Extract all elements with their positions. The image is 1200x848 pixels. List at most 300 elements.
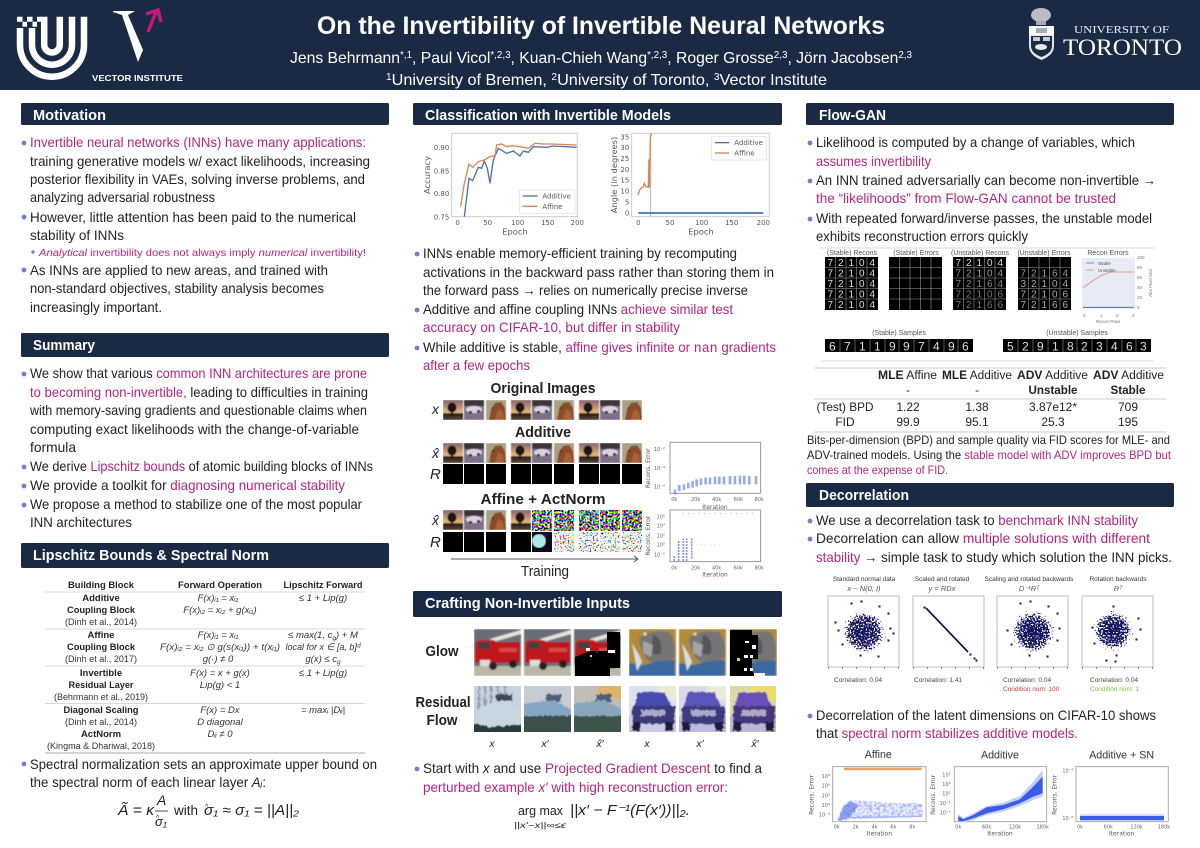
chart: additive reconstruction error: 80k bbox=[755, 497, 764, 503]
text block: flow-gan bullets: exhibits reconstruction errors quickly bbox=[816, 228, 1028, 244]
caption: flow-gan table: comes at the expense of FID. bbox=[807, 463, 948, 477]
chart: additive + spectral norm decorrelation error: 60k bbox=[1104, 824, 1113, 830]
chart: affine reconstruction error: 10⁴ bbox=[657, 524, 665, 530]
table: building blocks: F(x) = Dx bbox=[200, 705, 241, 716]
chart: recon errors by pass: 0 bbox=[1137, 305, 1140, 310]
table: BPD and FID scores: Unstable bbox=[1028, 385, 1078, 397]
table: BPD and FID scores: 25.3 bbox=[1041, 415, 1065, 429]
chart: recon errors by pass: Abs Pixel Dist bbox=[1148, 268, 1153, 297]
grid: stable errors bbox=[889, 257, 942, 310]
chart: affine reconstruction error: 40k bbox=[712, 565, 721, 571]
scatter: standard normal data bbox=[828, 576, 899, 684]
chart: accuracy vs epoch: 0.80 bbox=[434, 190, 449, 198]
logo: University of Toronto: UNIVERSITY OF bbox=[1074, 25, 1169, 36]
table: building blocks: (Dinh et al., 2017) bbox=[65, 654, 137, 665]
image labels: x, x', x-hat': x bbox=[488, 738, 495, 750]
text block: classification bullets bbox=[415, 245, 776, 373]
chart: affine reconstruction error: 20k bbox=[691, 565, 700, 571]
text block: cifar-10 decorrelation: that spectral norm stabilizes additive models. bbox=[816, 725, 1078, 741]
chart: recon errors by pass bbox=[1082, 255, 1153, 324]
chart: additive decorrelation error: Recons. Error bbox=[930, 775, 937, 815]
text block: classification bullets: the forward pass → relies on numerically precise inverse bbox=[423, 282, 748, 298]
table: building blocks: ≤ 1 + Lip(g) bbox=[299, 593, 347, 604]
figure: MNIST reconstructions and errors: (Stable) Errors bbox=[893, 250, 939, 257]
grid: stable reconstructions: 72104 bbox=[828, 290, 876, 300]
table: building blocks: F(x)ᵢ₁ = xᵢ₁ bbox=[198, 630, 238, 641]
heading: flow-gan bbox=[806, 103, 1174, 125]
authors: , Jörn Jacobsen bbox=[787, 50, 898, 67]
table: BPD and FID scores: MLE Affine bbox=[878, 370, 937, 382]
header banner bbox=[0, 0, 1200, 90]
table: building blocks bbox=[45, 580, 365, 753]
scatter: scaled and rotated: Scaled and rotated bbox=[915, 576, 970, 583]
caption: flow-gan table: Bits-per-dimension (BPD) and sample quality via FID scores for MLE- and bbox=[807, 433, 1170, 447]
figure: MNIST reconstructions and errors: (Unstable) Recons bbox=[951, 250, 1009, 257]
table: building blocks: Additive bbox=[82, 593, 120, 604]
text block: cifar-10 decorrelation bbox=[808, 707, 1156, 741]
scatter: scaling and rotated backwards bbox=[985, 576, 1074, 693]
text block: flow-gan bullets bbox=[808, 134, 1156, 244]
authors: *,2,3 bbox=[490, 50, 511, 61]
text block: motivation bullets: posterior flexibility in VAEs, solving inverse problems, and bbox=[30, 171, 365, 187]
chart: angle vs epoch: 30 bbox=[620, 144, 629, 152]
text block: summary bullets: We show that various common INN architectures are prone bbox=[30, 365, 367, 381]
image grid: glow examples bbox=[474, 629, 777, 676]
text block: flow-gan bullets: the “likelihoods” from Flow-GAN cannot be trusted bbox=[816, 190, 1116, 206]
chart: additive decorrelation error: 10⁻¹ bbox=[940, 801, 951, 807]
chart: affine decorrelation error: 2k bbox=[853, 824, 859, 830]
table: BPD and FID scores: FID bbox=[835, 415, 855, 429]
table: BPD and FID scores: (Test) BPD bbox=[816, 400, 874, 414]
formula: spectral normalization: with bbox=[173, 803, 198, 818]
table: building blocks: F(x) = x + g(x) bbox=[190, 668, 250, 679]
text block: flow-gan bullets: Likelihood is computed by a change of variables, which bbox=[816, 134, 1135, 150]
logo: Vector Institute bbox=[92, 10, 183, 83]
panel: motivation bbox=[21, 103, 389, 315]
chart: additive decorrelation error bbox=[930, 750, 1049, 838]
chart: angle vs epoch bbox=[609, 133, 770, 236]
text block: classification bullets: activations in the backward pass rather than storing them in bbox=[423, 264, 774, 280]
table: building blocks: Coupling Block bbox=[67, 605, 136, 616]
chart: angle vs epoch: 15 bbox=[620, 177, 629, 185]
chart: affine decorrelation error: 6k bbox=[890, 824, 896, 830]
image labels: x, x', x-hat': x′ bbox=[695, 738, 705, 750]
chart: recon errors by pass: 20 bbox=[1137, 295, 1143, 300]
table: building blocks: Coupling Block bbox=[67, 642, 136, 653]
chart: additive reconstruction error: 20k bbox=[691, 497, 700, 503]
scatter: rotation backwards: Rotation backwards bbox=[1089, 576, 1147, 583]
table: building blocks: Lipschitz Forward bbox=[284, 580, 363, 591]
chart: additive reconstruction error bbox=[645, 442, 764, 511]
table: building blocks: Residual Layer bbox=[68, 680, 134, 691]
chart: additive decorrelation error: 60k bbox=[982, 824, 991, 830]
text block: decorrelation bullets: Decorrelation can allow multiple solutions with different bbox=[816, 530, 1150, 546]
table: building blocks: g bbox=[337, 659, 341, 666]
chart: affine reconstruction error: 10⁻² bbox=[654, 552, 665, 558]
chart: angle vs epoch: 10 bbox=[620, 187, 629, 195]
scatter: rotation backwards: Rᵀ bbox=[1114, 584, 1123, 593]
samples: stable: (Stable) Samples bbox=[872, 330, 926, 337]
figure: additive reconstructions: Additive bbox=[515, 424, 571, 441]
image labels: x, x', x-hat': x̂′ bbox=[750, 738, 760, 750]
chart: additive + spectral norm decorrelation error: 10⁻⁴ bbox=[1062, 769, 1073, 775]
formula: spectral normalization: ^ bbox=[156, 815, 160, 822]
table: building blocks: Forward Operation bbox=[178, 580, 262, 591]
chart: additive reconstruction error: 10⁻⁴ bbox=[654, 484, 665, 490]
chart: angle vs epoch: 35 bbox=[620, 133, 629, 141]
image labels: x, x', x-hat': x̂′ bbox=[595, 738, 605, 750]
table: building blocks: Invertible bbox=[80, 668, 122, 679]
chart: affine reconstruction error: 10⁶ bbox=[657, 514, 665, 520]
table: building blocks: (Kingma & Dhariwal, 2018) bbox=[47, 741, 155, 752]
text block: motivation bullets: increasingly important. bbox=[30, 299, 162, 315]
chart: additive decorrelation error: 10³ bbox=[942, 782, 951, 788]
chart: affine reconstruction error: 0k bbox=[671, 565, 677, 571]
chart: affine reconstruction error: 60k bbox=[734, 565, 743, 571]
text block: motivation bullets: Invertible neural networks (INNs) have many applications: bbox=[30, 134, 366, 150]
formula: reconstruction objective: arg max bbox=[518, 803, 563, 818]
figure: MNIST reconstructions and errors bbox=[821, 248, 1154, 361]
title: On the Invertibility of Invertible Neural Networks bbox=[317, 12, 885, 40]
text block: spectral normalization: the spectral norm of each linear layer Aᵢ: bbox=[30, 774, 266, 790]
arrow: training bbox=[451, 556, 638, 580]
table: building blocks: (Dinh et al., 2014) bbox=[65, 617, 137, 628]
image labels: x, x', x-hat': x bbox=[643, 738, 650, 750]
figure: original images: Original Images bbox=[490, 380, 596, 397]
table: building blocks: ≤ 1 + Lip(g) bbox=[299, 668, 347, 679]
heading: motivation bbox=[21, 103, 389, 125]
chart: accuracy vs epoch: Accuracy bbox=[422, 156, 432, 194]
formula: spectral normalization: Ã = κ bbox=[117, 802, 156, 819]
grid: unstable errors: 32104 bbox=[1020, 279, 1068, 290]
chart: accuracy vs epoch: 0 bbox=[455, 219, 460, 227]
chart: recon errors by pass: 100 bbox=[1137, 255, 1145, 260]
chart: angle vs epoch: 0 bbox=[625, 209, 629, 217]
table: building blocks: Diagonal Scaling bbox=[64, 705, 139, 716]
chart: additive decorrelation error: 10⁵ bbox=[942, 773, 951, 779]
text block: motivation bullets: stability of INNs bbox=[30, 227, 124, 243]
formula: spectral normalization: ^ bbox=[205, 804, 209, 811]
table: building blocks: Lip(g) < 1 bbox=[200, 680, 240, 691]
panel: crafting non-invertible inputs bbox=[413, 591, 782, 830]
table: BPD and FID scores: 95.1 bbox=[965, 415, 989, 429]
table: BPD and FID scores: - bbox=[975, 385, 979, 397]
table: building blocks: local for x ∈ [a, b]ᵈ bbox=[286, 642, 362, 653]
chart: angle vs epoch: 5 bbox=[625, 198, 629, 206]
scatter: rotation backwards bbox=[1082, 576, 1153, 693]
table: building blocks: g(x) ≤ c bbox=[305, 654, 337, 665]
formula: reconstruction objective: ||x′−x||∞≤ϵ bbox=[514, 821, 567, 830]
chart: affine reconstruction error: Iteration bbox=[702, 572, 728, 579]
scatter: scaled and rotated: Correlation: 1.41 bbox=[914, 677, 962, 684]
affiliations: Vector Institute bbox=[720, 72, 827, 89]
panel: classification with invertible models bbox=[413, 103, 782, 580]
table: BPD and FID scores: 3.87e12* bbox=[1029, 400, 1077, 414]
chart: affine reconstruction error: Recons. Error bbox=[645, 515, 652, 556]
heading: lipschitz bbox=[21, 543, 389, 568]
chart: angle vs epoch: 0 bbox=[636, 219, 641, 227]
heading: summary bbox=[21, 333, 389, 357]
chart: additive decorrelation error: 0k bbox=[955, 824, 961, 830]
chart: additive decorrelation error: Additive bbox=[981, 750, 1019, 762]
figure: MNIST reconstructions and errors: (Stable) Recons bbox=[827, 250, 878, 257]
grid: stable reconstructions bbox=[825, 257, 878, 311]
chart: angle vs epoch: Additive bbox=[734, 139, 763, 147]
figure: additive reconstructions: x̂ bbox=[431, 445, 440, 461]
table: BPD and FID scores: 1.22 bbox=[896, 400, 920, 414]
figure: affine + actnorm reconstructions: R bbox=[430, 534, 441, 551]
figure: original images bbox=[431, 380, 642, 420]
chart: additive reconstruction error: 40k bbox=[712, 497, 721, 503]
chart: additive + spectral norm decorrelation error: Iteration bbox=[1109, 831, 1135, 838]
table: building blocks: F(x)ᵢ₁ = xᵢ₁ bbox=[198, 593, 238, 604]
chart: recon errors by pass: 3 bbox=[1132, 313, 1135, 318]
text block: summary bullets: computing exact likelihoods with the change-of-variable bbox=[30, 421, 359, 437]
chart: additive decorrelation error: 10⁻³ bbox=[940, 810, 951, 816]
affiliations: University of Toronto, bbox=[557, 72, 714, 89]
grid: stable reconstructions: 72104 bbox=[828, 268, 876, 280]
chart: angle vs epoch: 25 bbox=[620, 155, 629, 163]
chart: additive + spectral norm decorrelation error: 120k bbox=[1130, 824, 1143, 830]
chart: angle vs epoch: Affine bbox=[734, 149, 755, 157]
authors: 2,3 bbox=[898, 50, 912, 61]
heading: classification bbox=[413, 103, 782, 125]
chart: recon errors by pass: 2 bbox=[1116, 313, 1119, 318]
affiliations: 1 bbox=[386, 72, 392, 83]
text block: decorrelation bullets bbox=[808, 512, 1172, 565]
text block: summary bullets: We provide a toolkit for diagnosing numerical stability bbox=[30, 477, 345, 493]
chart: recon errors by pass: 0 bbox=[1083, 313, 1086, 318]
text block: motivation bullets: non-standard objectives, stability analysis becomes bbox=[30, 280, 324, 296]
chart: accuracy vs epoch: Additive bbox=[542, 193, 571, 201]
chart: accuracy vs epoch: 0.85 bbox=[434, 167, 449, 175]
text block: summary bullets: We propose a method to stabilize one of the most popular bbox=[30, 496, 362, 512]
panel: lipschitz bounds and spectral norm bbox=[21, 543, 389, 829]
heading: flow-gan: Flow-GAN bbox=[819, 107, 886, 124]
chart: affine decorrelation error: 0k bbox=[834, 824, 840, 830]
row label: glow: Glow bbox=[426, 644, 459, 660]
chart: accuracy vs epoch: Epoch bbox=[502, 226, 528, 236]
grid: unstable reconstructions: 72106 bbox=[956, 290, 1004, 300]
chart: recon errors by pass: 40 bbox=[1137, 285, 1143, 290]
scatter: standard normal data: Standard normal data bbox=[833, 576, 896, 583]
text block: summary bullets: with memory-saving gradients and questionable claims when bbox=[29, 402, 367, 418]
table: BPD and FID scores: ADV Additive bbox=[1093, 370, 1164, 382]
row label: residual flow bbox=[416, 695, 470, 729]
chart: additive reconstruction error: 10⁻³ bbox=[654, 466, 665, 472]
text block: projected gradient descent: Start with x and use Projected Gradient Descent to find a bbox=[423, 760, 762, 776]
logo: University of Toronto: TORONTO bbox=[1063, 35, 1182, 61]
chart: affine decorrelation error: 10⁻³ bbox=[819, 813, 830, 819]
chart: affine reconstruction error: 80k bbox=[755, 565, 764, 571]
chart: angle vs epoch: Epoch bbox=[688, 226, 714, 236]
heading: crafting bbox=[413, 591, 782, 617]
text block: flow-gan bullets: assumes invertibility bbox=[816, 153, 931, 169]
caption: flow-gan table bbox=[807, 433, 1172, 477]
chart: affine reconstruction error bbox=[645, 510, 764, 579]
heading: motivation: Motivation bbox=[33, 107, 106, 124]
grid: unstable reconstructions: 72104 bbox=[956, 258, 1004, 269]
chart: affine decorrelation error bbox=[808, 749, 926, 838]
figure: additive reconstructions bbox=[430, 424, 642, 484]
chart: additive reconstruction error: Recons. Error bbox=[645, 448, 652, 488]
image labels: x, x', x-hat': x′ bbox=[540, 738, 550, 750]
chart: affine reconstruction error: 10² bbox=[657, 533, 665, 539]
panel: flow-gan bbox=[806, 103, 1174, 477]
logo: University of Toronto bbox=[1029, 8, 1182, 61]
grid: unstable reconstructions: 72104 bbox=[956, 268, 1004, 280]
text block: motivation bullets: Analytical invertibility does not always imply numerical invertibility! bbox=[38, 247, 366, 259]
text block: summary bullets: to becoming non-invertible, leading to difficulties in training bbox=[30, 384, 368, 400]
text block: classification bullets: after a few epochs bbox=[423, 357, 530, 373]
text block: classification bullets: accuracy on CIFAR-10, but differ in stability bbox=[423, 319, 680, 335]
text block: motivation bullets: training generative models w/ exact likelihoods, increasing bbox=[30, 153, 370, 169]
authors: , Roger Grosse bbox=[667, 50, 774, 67]
chart: additive + spectral norm decorrelation error: 10⁻⁵ bbox=[1062, 816, 1073, 822]
authors: , Paul Vicol bbox=[412, 50, 490, 67]
chart: additive + spectral norm decorrelation error bbox=[1052, 750, 1170, 838]
grid: stable reconstructions: 72104 bbox=[828, 258, 876, 269]
figure: additive reconstructions: R bbox=[430, 466, 441, 483]
table: building blocks: F(x)ᵢ₂ = xᵢ₂ + g(xᵢ₁) bbox=[183, 605, 257, 616]
figure: MNIST reconstructions and errors: (Unstable) Errors bbox=[1017, 250, 1071, 257]
scatter: rotation backwards: Condition num: 1 bbox=[1090, 686, 1140, 693]
table: BPD and FID scores: Stable bbox=[1110, 385, 1146, 397]
logo: Vector Institute: VECTOR INSTITUTE bbox=[92, 73, 183, 83]
chart: affine decorrelation error: Recons. Error bbox=[808, 775, 815, 815]
chart: angle vs epoch: 150 bbox=[725, 219, 738, 227]
scatter: rotation backwards: Correlation: 0.04 bbox=[1090, 677, 1138, 684]
figure: affine + actnorm reconstructions: x̂ bbox=[431, 512, 440, 528]
table: building blocks: ≤ max(1, c bbox=[288, 630, 332, 641]
chart: affine decorrelation error: 10³ bbox=[822, 793, 830, 799]
formula: spectral normalization: σ₁ bbox=[155, 814, 167, 829]
chart: additive decorrelation error: Iteration bbox=[987, 831, 1013, 838]
formula: reconstruction objective bbox=[514, 802, 690, 830]
chart: affine reconstruction error: 10⁰ bbox=[657, 543, 665, 549]
chart: affine decorrelation error: 8k bbox=[909, 824, 915, 830]
table: building blocks: Affine bbox=[88, 630, 114, 641]
heading: classification: Classification with Invertible Models bbox=[425, 107, 671, 124]
text block: flow-gan bullets: With repeated forward/inverse passes, the unstable model bbox=[816, 210, 1152, 226]
chart: additive + spectral norm decorrelation error: Additive + SN bbox=[1089, 750, 1154, 762]
text block: classification bullets: While additive is stable, affine gives infinite or nan gradients bbox=[423, 339, 776, 357]
table: BPD and FID scores: MLE Additive bbox=[942, 370, 1012, 382]
text block: motivation bullets: As INNs are applied to new areas, and trained with bbox=[30, 262, 328, 278]
chart: additive + spectral norm decorrelation error: Recons. Error bbox=[1052, 775, 1059, 815]
text block: flow-gan bullets: An INN trained adversarially can become non-invertible → bbox=[816, 172, 1156, 188]
panel: decorrelation bbox=[806, 483, 1174, 838]
formula: reconstruction objective: ||x′ − F⁻¹(F(x′))||₂. bbox=[570, 802, 690, 819]
table: building blocks: Building Block bbox=[68, 580, 135, 591]
row label: residual flow: Flow bbox=[426, 713, 458, 729]
samples: stable bbox=[825, 330, 973, 354]
text block: decorrelation bullets: We use a decorrelation task to benchmark INN stability bbox=[816, 512, 1138, 528]
samples: unstable: 5291823463 bbox=[1007, 340, 1147, 354]
figure: affine + actnorm reconstructions: Affine + ActNorm bbox=[480, 491, 606, 508]
table: BPD and FID scores bbox=[814, 368, 1166, 432]
table: building blocks: F(x)ᵢ₂ = xᵢ₂ ⊙ g(s(xᵢ₁)) + t(xᵢ₁) bbox=[160, 642, 280, 653]
arrow: training: Training bbox=[521, 563, 569, 580]
text block: motivation bullets: analyzing adversarial robustness bbox=[30, 189, 215, 205]
chart: additive reconstruction error: 10⁻² bbox=[654, 447, 665, 453]
authors: *,2,3 bbox=[647, 50, 668, 61]
chart: additive reconstruction error: 0k bbox=[671, 497, 677, 503]
grid: unstable errors: 72166 bbox=[1020, 300, 1068, 311]
chart: recon errors by pass: Stable bbox=[1098, 261, 1111, 266]
chart: recon errors by pass: 1 bbox=[1100, 313, 1103, 318]
figure: affine + actnorm reconstructions bbox=[430, 491, 642, 552]
heading: crafting: Crafting Non-Invertible Inputs bbox=[425, 595, 630, 612]
grid: unstable reconstructions: 72164 bbox=[956, 279, 1004, 290]
table: BPD and FID scores: 99.9 bbox=[896, 415, 920, 429]
grid: stable reconstructions: 72104 bbox=[828, 279, 876, 290]
text block: motivation bullets: However, little attention has been paid to the numerical bbox=[30, 209, 356, 225]
text block: summary bullets bbox=[22, 365, 373, 530]
table: building blocks: D diagonal bbox=[197, 717, 244, 728]
affiliations: 3 bbox=[714, 72, 720, 83]
authors: *,1 bbox=[400, 50, 412, 61]
chart: additive reconstruction error: 60k bbox=[734, 497, 743, 503]
table: BPD and FID scores: - bbox=[906, 385, 910, 397]
chart: recon errors by pass: 60 bbox=[1137, 275, 1143, 280]
text block: spectral normalization bbox=[22, 756, 377, 790]
table: building blocks: = maxᵢ |Dᵢᵢ| bbox=[301, 705, 345, 716]
scatter: standard normal data: x ~ N(0, I) bbox=[846, 584, 881, 593]
scatter: scaling and rotated backwards: Scaling and rotated backwards bbox=[985, 576, 1074, 583]
table: building blocks: g bbox=[332, 635, 336, 642]
table: BPD and FID scores: ADV Additive bbox=[1017, 370, 1088, 382]
chart: affine decorrelation error: Affine bbox=[865, 749, 892, 761]
chart: accuracy vs epoch: 150 bbox=[541, 219, 554, 227]
formula: spectral normalization: σ₁ ≈ σ₁ = ||A||₂ bbox=[204, 803, 299, 819]
heading: summary: Summary bbox=[33, 337, 96, 354]
chart: additive decorrelation error: 120k bbox=[1009, 824, 1021, 830]
chart: additive + spectral norm decorrelation error: 0k bbox=[1077, 824, 1083, 830]
text block: classification bullets: Additive and affine coupling INNs achieve similar test bbox=[423, 301, 733, 317]
caption: flow-gan table: ADV-trained models. Using the stable model with ADV improves BPD but bbox=[807, 448, 1172, 462]
authors: , Kuan-Chieh Wang bbox=[511, 50, 647, 67]
samples: unstable: (Unstable) Samples bbox=[1046, 330, 1108, 337]
table: building blocks: (Dinh et al., 2014) bbox=[65, 717, 137, 728]
table: building blocks: ) + M bbox=[335, 630, 358, 641]
authors: 2,3 bbox=[774, 50, 788, 61]
table: BPD and FID scores: 1.38 bbox=[965, 400, 989, 414]
scatter: scaled and rotated bbox=[913, 576, 984, 684]
text block: cifar-10 decorrelation: Decorrelation of the latent dimensions on CIFAR-10 shows bbox=[816, 707, 1156, 723]
chart: additive + spectral norm decorrelation error: 180k bbox=[1158, 824, 1170, 830]
text block: summary bullets: formula bbox=[30, 439, 76, 455]
text block: projected gradient descent: perturbed example x′ with high reconstruction error: bbox=[423, 779, 728, 795]
text block: motivation bullets bbox=[22, 134, 370, 315]
table: building blocks: ActNorm bbox=[81, 729, 121, 740]
scatter: scaled and rotated: y = RDx bbox=[928, 584, 956, 593]
grid: unstable errors: 72106 bbox=[1020, 290, 1068, 300]
chart: affine decorrelation error: 4k bbox=[872, 824, 878, 830]
text block: classification bullets: INNs enable memory-efficient training by recomputing bbox=[423, 245, 737, 261]
chart: additive reconstruction error: Iteration bbox=[702, 504, 728, 511]
chart: affine decorrelation error: Iteration bbox=[867, 831, 892, 838]
chart: affine decorrelation error: 10⁰ bbox=[822, 803, 830, 809]
text block: projected gradient descent bbox=[415, 760, 762, 795]
scatter: scaling and rotated backwards: Correlation: 0.04 bbox=[1003, 677, 1051, 684]
grid: unstable reconstructions bbox=[953, 257, 1006, 311]
formula: spectral normalization bbox=[117, 792, 299, 829]
scatter: standard normal data: Correlation: 0.04 bbox=[834, 677, 882, 684]
text block: summary bullets: We derive Lipschitz bounds of atomic building blocks of INNs bbox=[30, 458, 373, 474]
grid: unstable errors bbox=[1018, 257, 1071, 311]
chart: accuracy vs epoch: 0.90 bbox=[434, 144, 449, 152]
